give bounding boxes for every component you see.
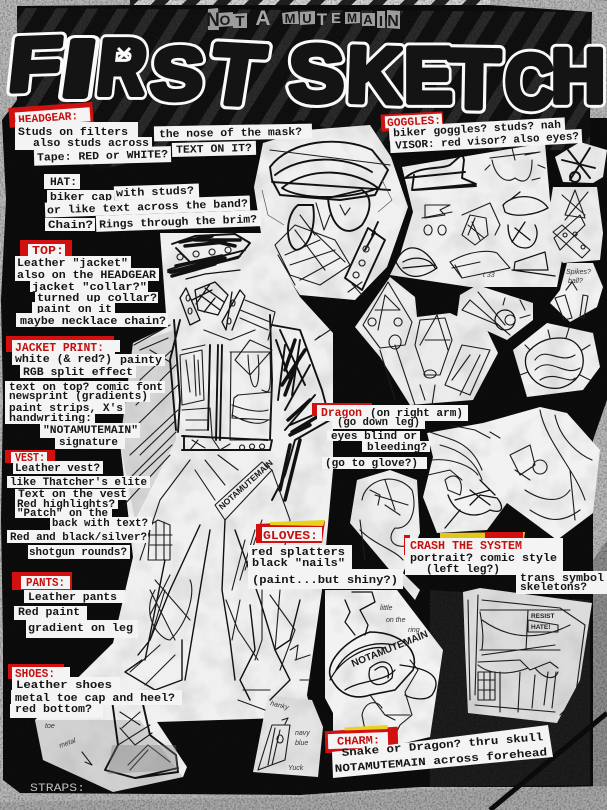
letters: A xyxy=(363,12,373,27)
text block: portrait? comic style xyxy=(410,553,557,565)
paper: round stud study xyxy=(457,285,533,340)
title black letter fill: T xyxy=(448,33,501,126)
title outline: F xyxy=(5,21,65,107)
text: signature: signature xyxy=(59,437,118,449)
text: paint on it: paint on it xyxy=(37,304,112,316)
notes: top xyxy=(15,240,168,328)
title outline: S xyxy=(148,33,207,115)
paper: crossed straps study xyxy=(545,187,603,263)
letters: M xyxy=(347,11,357,25)
background: bottom speckled strip xyxy=(0,786,607,810)
letters: T xyxy=(235,13,245,30)
paper: spikes note xyxy=(550,263,603,322)
title black letter fill: K xyxy=(345,31,404,120)
text: eyes blind: eyes blind or xyxy=(331,431,417,443)
text: paint but shiny xyxy=(248,569,403,589)
text: white and red: white (& red?) xyxy=(15,354,112,366)
sketch: right arm hatched sleeve xyxy=(272,325,330,500)
sketch: skull charm xyxy=(330,592,436,735)
notes: charm xyxy=(325,725,553,778)
title black letter fill: S xyxy=(148,33,207,115)
heading: GLOVES: GLOVES: xyxy=(263,530,318,543)
sketch: studded bandage xyxy=(553,215,590,258)
text: metal toe cap: metal toe cap and heel? xyxy=(15,693,175,705)
text: biker goggles: biker goggles? studs? nah xyxy=(393,120,561,140)
sketch: full figure xyxy=(45,234,330,778)
heading: GLOVES xyxy=(256,520,325,543)
text: shotgun rounds: shotgun rounds? xyxy=(29,547,127,559)
text: visor: VISOR: red visor? also eyes? xyxy=(395,131,579,153)
sketch: round stud xyxy=(462,292,530,335)
sketch: dragon xyxy=(428,410,592,528)
sketch: legs xyxy=(125,520,312,710)
title outline: T xyxy=(204,27,270,123)
paper: spiked circle study xyxy=(513,323,600,397)
notes: headgear xyxy=(8,102,312,232)
paper: charm skull xyxy=(325,590,443,760)
title black letter fill: C xyxy=(505,40,554,125)
text: straps: STRAPS: xyxy=(30,783,85,795)
text: go to glove: (go to glove?) xyxy=(325,458,418,470)
title black letter fill: F xyxy=(5,21,65,107)
sketch: crash the system portrait: RESIST xyxy=(531,613,555,620)
text: comic font: text on top? comic font xyxy=(9,382,163,394)
heading: PANTS: PANTS: xyxy=(26,577,65,590)
text: snake or dragon, across forehead xyxy=(332,725,553,778)
title outline: K xyxy=(345,31,404,120)
paper: small X study xyxy=(555,142,607,183)
text: red highlights: Red highlights? xyxy=(17,499,115,511)
text: necklace chain: maybe necklace chain? xyxy=(20,316,166,328)
sketch: gas mask and collar xyxy=(180,270,245,330)
text: studs on filters xyxy=(15,122,152,150)
text: newsprint: newsprint (gradients) xyxy=(9,391,148,403)
sketch paper cutouts xyxy=(35,125,607,792)
sketch: note scrap xyxy=(258,700,310,772)
sketch: vest patch with signature xyxy=(140,455,290,560)
letters: N xyxy=(387,13,399,30)
sketch: skull charm: NOTAMUTEMAIN xyxy=(350,629,430,670)
sketch: dragon side head xyxy=(360,479,414,560)
title outline: S xyxy=(289,29,344,119)
text block: (left leg?) xyxy=(426,564,500,576)
text: gradient on leg: gradient on leg xyxy=(28,623,133,635)
sketch: margin note metal xyxy=(45,723,92,765)
text: handwriting: handwriting: xyxy=(9,413,92,425)
text: patch: "Patch" on the xyxy=(17,508,108,520)
paper: dragon side study xyxy=(350,470,420,600)
sketch: note scrap: blue xyxy=(295,740,308,747)
text: leather pants: Leather pants xyxy=(28,592,117,604)
letters: T xyxy=(317,10,328,29)
title xyxy=(5,21,605,126)
text: hat: HAT: xyxy=(50,177,77,189)
text: also on the headgear: also on the HEADGEAR xyxy=(17,270,156,282)
text: text on the vest: Text on the vest xyxy=(18,489,127,501)
sketch: crash the system portrait: HATE! xyxy=(531,624,550,631)
title black letter fill: T xyxy=(204,27,270,123)
sketch: belt xyxy=(182,436,272,450)
heading: CHARM: CHARM: xyxy=(337,734,380,749)
sketch: boot xyxy=(105,700,178,778)
letters: N xyxy=(206,10,220,31)
sketch: cap xyxy=(168,234,250,276)
letters: A xyxy=(255,7,271,30)
sketch: right column studies: ball? xyxy=(568,278,583,285)
heading and text: dragon on right arm: (on right arm) xyxy=(370,408,463,420)
title black letter fill: I xyxy=(57,25,101,114)
text: notamutemain: "NOTAMUTEMAIN" xyxy=(43,425,138,437)
letters: U xyxy=(302,11,312,26)
X mark on the R xyxy=(118,48,130,60)
heading and text: dragon on right arm: Dragon xyxy=(321,407,362,420)
sketch: crash the system portrait xyxy=(468,595,585,715)
heading and text: dragon on right arm: (go down leg) xyxy=(337,417,420,429)
background: diagonal black line bottom right xyxy=(490,713,607,810)
text: painty: painty xyxy=(120,355,162,367)
letter boxes xyxy=(208,8,400,30)
background: diagonal stripes behind title xyxy=(17,8,590,170)
heading: HEADGEAR: HEADGEAR: xyxy=(18,110,79,127)
title outline: H xyxy=(551,35,605,119)
text: studs on filters: Studs on filters xyxy=(18,127,128,139)
sketch: small straps xyxy=(555,282,588,320)
title outline: C xyxy=(505,40,554,125)
text: paint but shiny: (paint...but shiny?) xyxy=(252,575,398,587)
heading: VEST: VEST: xyxy=(15,452,45,465)
text: rgb split: RGB split effect xyxy=(23,367,133,379)
title black letter fill: H xyxy=(551,35,605,119)
sketch: margin note metal: metal xyxy=(58,737,77,750)
sketch: skull charm: on the xyxy=(386,617,406,624)
notes: trans symbol: skeletons? xyxy=(520,582,587,594)
sketch: right column studies xyxy=(553,148,595,320)
sketch: crossed straps xyxy=(562,190,588,220)
text: red bottom: red bottom? xyxy=(15,704,92,716)
paper: mask close-up xyxy=(254,125,408,300)
text: hat xyxy=(44,174,80,189)
heading: SHOES xyxy=(8,664,70,681)
heading: VEST xyxy=(5,450,55,465)
notes: jacket print xyxy=(5,336,165,449)
background: dark lower right panel xyxy=(430,590,590,787)
paper: dragon study xyxy=(423,407,600,540)
sketch: hat and goggle studies: t 33 xyxy=(483,272,495,279)
letters: M xyxy=(285,11,295,26)
text: chain xyxy=(45,218,95,232)
heading: GOGGLES: GOGGLES: xyxy=(387,114,441,130)
notes: crash the system xyxy=(404,532,563,576)
text: turned up collar: turned up collar? xyxy=(37,293,157,305)
paper mottling xyxy=(58,125,602,784)
notes: trans symbol: trans symbol xyxy=(520,573,604,585)
heading: TOP: TOP: xyxy=(32,245,64,258)
background: right hand speckled strip xyxy=(593,540,607,795)
notes: shoes xyxy=(8,664,182,718)
paper: main figure xyxy=(35,233,333,792)
sketch: mask close-up xyxy=(262,142,392,295)
text: with studs: with studs? xyxy=(116,186,194,200)
text: biker cap: biker cap xyxy=(50,192,112,204)
heading: SHOES: SHOES: xyxy=(15,668,55,681)
text: red bottom xyxy=(10,704,103,718)
text: snake or dragon, across forehead: Snake or Dragon? thru skull xyxy=(341,732,544,760)
text: paint strips: paint strips, X's xyxy=(9,403,123,415)
text: leather jacket: Leather "jacket" xyxy=(17,258,128,270)
sketch: note scrap: navy xyxy=(295,730,310,737)
text block: CRASH THE SYSTEM xyxy=(410,540,522,553)
title outline: I xyxy=(57,25,101,114)
paper: grey wash around boot xyxy=(35,720,183,792)
text: back with text: back with text? xyxy=(52,518,148,530)
sketch: vest patch with signature: NOTAMUTEMAIN xyxy=(217,458,275,511)
text: rings through the brim: Rings through the brim? xyxy=(99,214,257,232)
heading and text: dragon on right arm xyxy=(312,403,468,429)
background: hazard stripes along top edge xyxy=(130,0,490,7)
text: red and black: Red and black/silver? xyxy=(10,532,147,544)
notes: dragon xyxy=(312,403,468,470)
sketch: torso and jacket xyxy=(124,300,275,505)
title black letter fill xyxy=(5,21,605,126)
paper: hat and goggles studies xyxy=(390,143,562,287)
notes: pants xyxy=(12,572,138,638)
sketch: note scrap: hanky xyxy=(269,700,290,712)
heading: JACKET PRINT xyxy=(6,336,120,355)
letters: O xyxy=(220,12,231,28)
heading: HEADGEAR xyxy=(8,102,94,128)
text: snake or dragon, across forehead: NOTAMUTEMAIN across forehead xyxy=(334,747,548,776)
text: jacket collar: jacket "collar?" xyxy=(32,282,147,294)
text: leather vest: Leather vest? xyxy=(15,463,100,475)
title black letter fill: E xyxy=(404,32,453,119)
heading: GOGGLES xyxy=(381,111,443,132)
text: red splatters, black nails: red splatters xyxy=(251,547,345,559)
text block xyxy=(405,538,563,576)
text: red splatters, black nails xyxy=(248,545,352,570)
text: spikes note: Spikes? xyxy=(566,269,591,276)
sketch: note scrap: Yuck xyxy=(288,765,304,772)
sketch: skull charm: little xyxy=(380,605,393,612)
sketch: shield studies xyxy=(363,282,490,405)
paper: note scrap xyxy=(253,695,323,777)
text: thatcher: like Thatcher's elite xyxy=(10,477,147,489)
heading: TOP xyxy=(20,240,72,258)
sketch: margin note metal: toe xyxy=(45,723,55,730)
sketch: skull charm: ring xyxy=(408,627,420,634)
title outline: R xyxy=(93,23,151,111)
sketch: hat and goggle studies xyxy=(396,148,555,279)
text: bleeding: bleeding? xyxy=(367,442,427,454)
sketch: spiked circle xyxy=(520,325,590,388)
text: studs on filters: also studs across xyxy=(33,138,149,150)
letters: E xyxy=(331,10,341,27)
text: red paint: Red paint xyxy=(18,607,80,619)
notes: trans symbol xyxy=(516,571,607,594)
paper: crash the system portrait xyxy=(463,588,592,723)
notes: gloves xyxy=(248,520,403,589)
heading band xyxy=(404,532,525,555)
heading: CHARM xyxy=(325,725,398,753)
heading: JACKET PRINT: JACKET PRINT: xyxy=(15,342,104,355)
letters: I xyxy=(379,13,383,30)
title outline: E xyxy=(404,32,453,119)
text: tape: Tape: RED or WHITE? xyxy=(37,149,168,165)
text: leather shoes: Leather shoes xyxy=(16,680,112,692)
text: across the band: or like text across the band? xyxy=(47,199,248,218)
notes: vest xyxy=(5,450,152,559)
text: red splatters, black nails: black "nails" xyxy=(252,558,345,570)
text: leather shoes xyxy=(12,677,120,692)
text: chain: Chain? xyxy=(48,220,93,232)
title outline: T xyxy=(448,33,501,126)
ransom letter header xyxy=(206,7,400,31)
title black letter fill: R xyxy=(93,23,151,111)
title black letter fill: S xyxy=(289,29,344,119)
text: text on it: TEXT ON IT? xyxy=(176,143,252,157)
paper: shield study xyxy=(355,277,498,405)
paper: grey wash on left of jacket xyxy=(120,330,176,520)
text: nose of the mask: the nose of the mask? xyxy=(159,127,302,141)
title outline xyxy=(5,21,605,126)
notes: goggles xyxy=(381,111,582,153)
sketch: star X symbol xyxy=(562,148,595,182)
